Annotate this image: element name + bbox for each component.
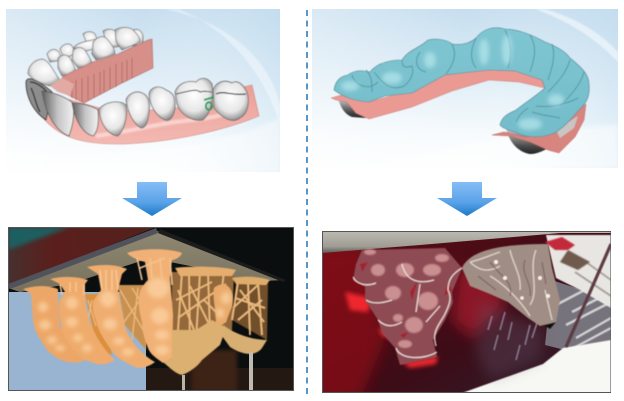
divider: dashed vertical line [306,10,308,396]
pads 5 and 6 [175,267,236,276]
grey tooth base right [506,128,552,154]
right arch teeth [214,284,233,330]
support rods [182,375,185,391]
illustration: aligner on gum [331,28,589,154]
photo: printed orange dental models [8,227,294,392]
pink gum right [492,104,586,153]
rod [566,244,611,347]
side dark edge [26,79,52,120]
supports model 3 [100,270,118,290]
top grey band [322,231,611,253]
speckled reflection [488,312,538,360]
clear aligner left [353,248,462,365]
lattice behind model 3 [118,285,146,350]
photo: clear aligners in resin [310,231,611,400]
panel: digital aligner model [312,9,618,168]
model 4 big [127,249,182,363]
panel: digital dental model [6,9,280,172]
supports model 2 [60,282,84,295]
bright red glow [345,292,438,368]
amber lattice between models [85,294,112,355]
model 3 [87,265,155,368]
supports model 4 [137,258,172,285]
arrow: right down [437,182,497,216]
green mark [204,97,214,110]
model 6 base [222,325,267,354]
illustration: lower jaw with teeth [26,28,259,144]
model 4 tan base [163,320,226,375]
front gum [36,85,259,144]
pink gum main [331,67,545,119]
tray highlights and grooves [352,30,584,122]
tooth highlights [38,278,231,356]
model 2 [50,277,115,364]
back teeth row [28,28,143,87]
model 1 [23,286,85,362]
front teeth [42,91,74,136]
lingual block [56,39,153,103]
arrow: left down [122,182,182,216]
right metallic stripes [545,280,611,350]
lattice behind big models [171,271,234,331]
grey tooth base left [338,98,366,118]
clear aligner right [462,244,560,326]
white bottom corner [462,340,611,393]
build plate [8,231,285,292]
blue tray [334,28,589,137]
